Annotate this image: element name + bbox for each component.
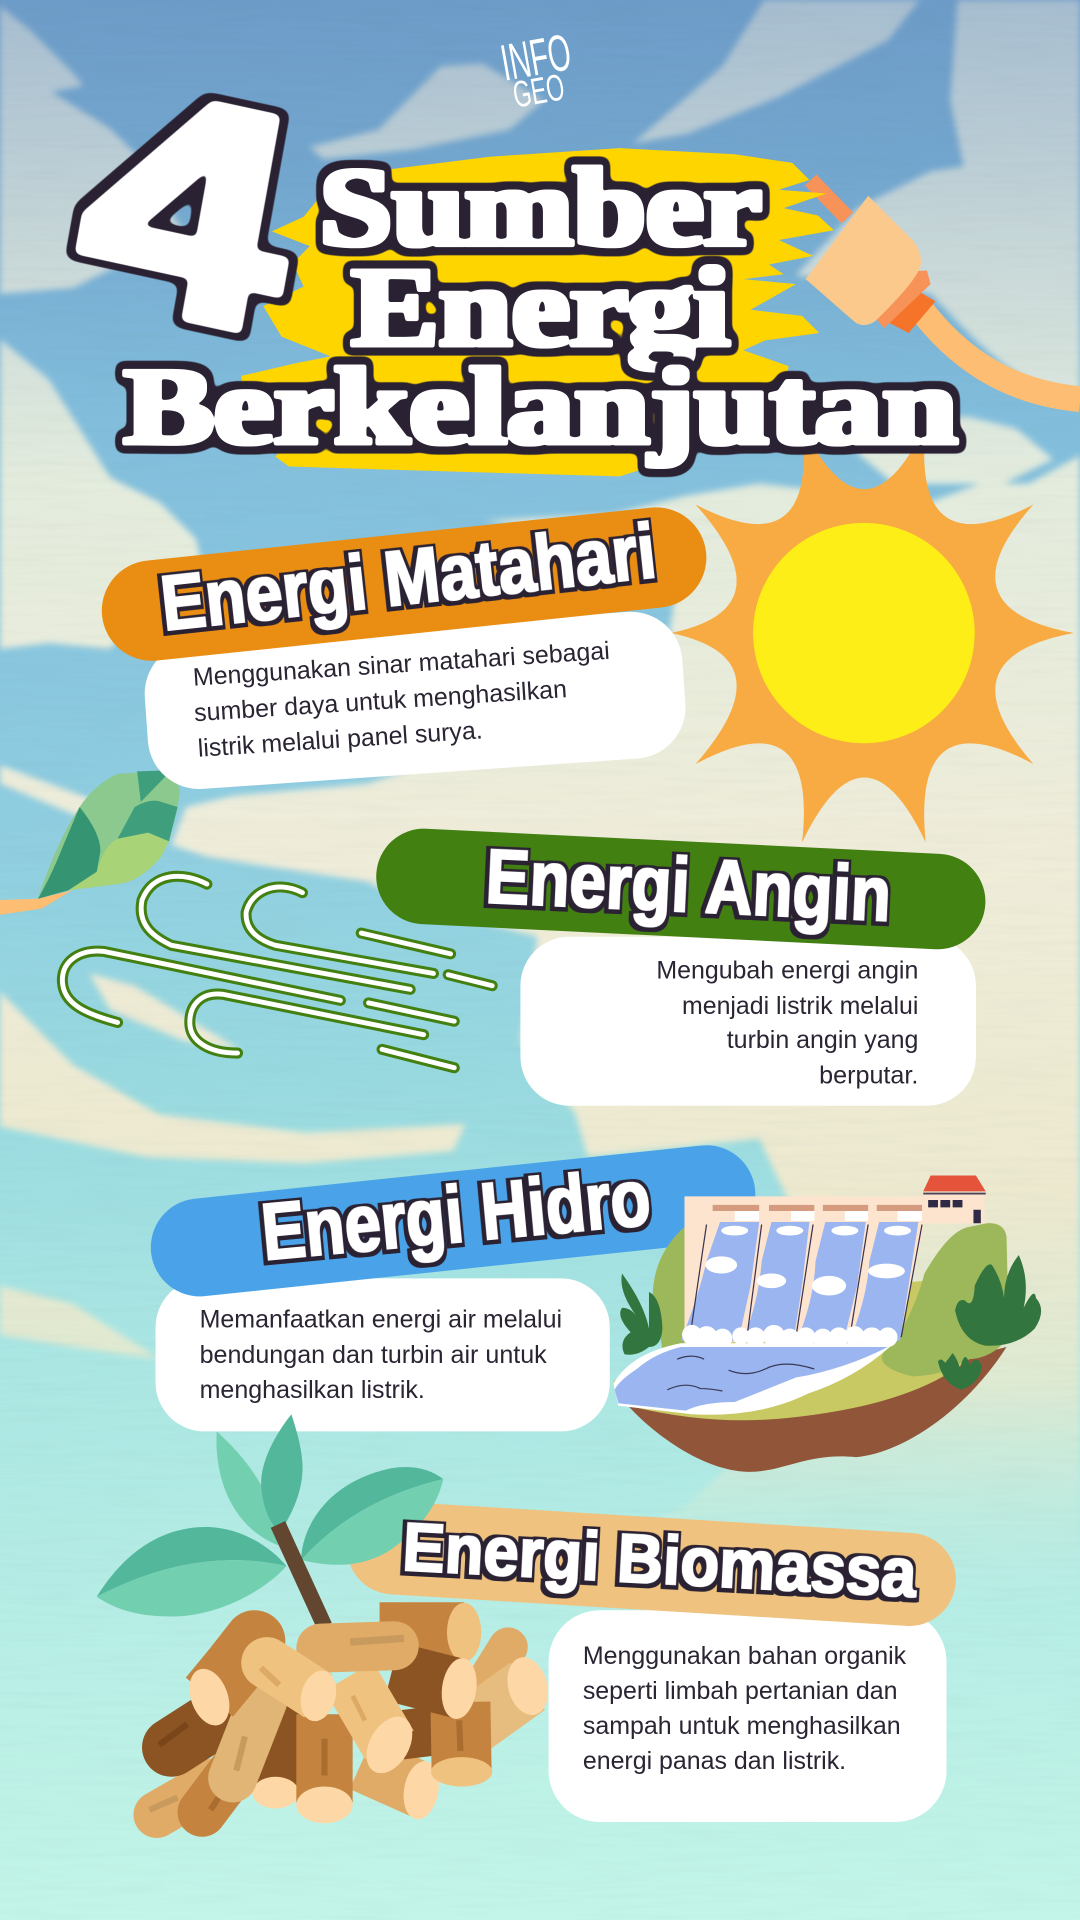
card: matahari description: sumber daya untuk menghasilkan <box>193 675 568 727</box>
bushes <box>620 1255 1041 1390</box>
illustration: plant and logs <box>97 1414 554 1823</box>
water falls <box>681 1222 918 1341</box>
pill: matahari heading <box>97 502 711 666</box>
pill: biomassa heading <box>344 1499 959 1629</box>
pillar lines <box>689 1224 922 1341</box>
illustration: dam on floating island <box>613 1176 1041 1472</box>
title <box>124 146 958 467</box>
card: matahari description: Menggunakan sinar matahari sebagai <box>192 637 611 692</box>
card: biomassa description: seperti limbah pertanian dan <box>583 1677 898 1705</box>
plug illustration <box>806 180 1080 399</box>
logo: INFO <box>496 23 575 92</box>
title number 4: 4 <box>57 16 323 401</box>
card: angin description: berputar. <box>819 1062 918 1090</box>
heading: energi hidro: Energi Hidro <box>258 1152 654 1278</box>
power house <box>923 1176 986 1191</box>
pill: hidro heading <box>146 1140 760 1301</box>
sun <box>671 425 1074 842</box>
pill: angin heading <box>374 826 988 952</box>
panel: energi angin <box>374 826 988 1106</box>
title: Berkelanjutan <box>124 345 958 467</box>
wind lines <box>62 876 492 1068</box>
island soil <box>620 1347 1007 1472</box>
leaves <box>97 1414 443 1616</box>
panel: energi matahari <box>97 502 711 792</box>
panel: energi hidro <box>146 1140 760 1431</box>
card: biomassa description: sampah untuk menghasilkan <box>583 1712 901 1740</box>
card: hidro description <box>156 1278 610 1431</box>
lake <box>613 1343 894 1415</box>
title: Energi <box>351 244 730 370</box>
card: hidro description: menghasilkan listrik. <box>200 1376 425 1404</box>
card: biomassa description: Menggunakan bahan organik <box>583 1642 907 1670</box>
card: angin description: Mengubah energi angin <box>656 956 918 984</box>
yellow brush stroke <box>241 148 834 476</box>
island grass <box>613 1273 1007 1420</box>
logo: GEO <box>510 66 568 116</box>
panel: energi biomassa <box>344 1499 959 1822</box>
logo <box>496 23 575 116</box>
card: biomassa description: energi panas dan listrik. <box>583 1747 846 1775</box>
card: biomassa description <box>549 1610 947 1822</box>
heading: energi matahari: Energi Matahari <box>156 506 660 648</box>
logs <box>149 1603 554 1823</box>
card: angin description: menjadi listrik melalui <box>682 992 918 1020</box>
heading: energi biomassa: Energi Biomassa <box>401 1508 919 1612</box>
heading: energi angin: Energi Angin <box>484 834 893 938</box>
title: Sumber <box>320 146 762 270</box>
card: matahari description <box>141 608 689 792</box>
dam wall <box>684 1196 984 1343</box>
lake ripples <box>667 1356 814 1391</box>
card: angin description <box>520 937 976 1106</box>
card: hidro description: bendungan dan turbin air untuk <box>200 1341 547 1369</box>
card: angin description: turbin angin yang <box>727 1026 918 1054</box>
stem <box>278 1524 324 1626</box>
card: matahari description: listrik melalui panel surya. <box>197 716 483 763</box>
leaf and branch <box>0 770 180 915</box>
card: hidro description: Memanfaatkan energi air melalui <box>200 1305 562 1333</box>
foam <box>682 1226 911 1349</box>
